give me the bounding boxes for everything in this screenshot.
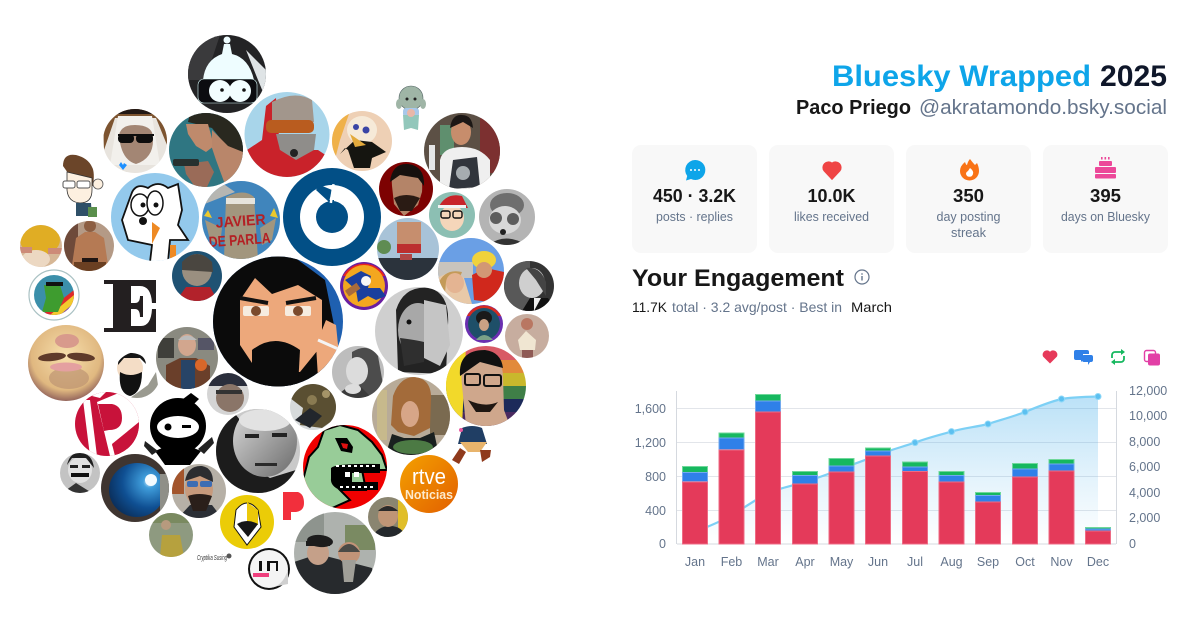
- avatar: Javier de Parla: DE PARLA: [208, 230, 271, 251]
- left axis labels: 1,200: [635, 436, 666, 450]
- engagement summary: March: [851, 299, 892, 315]
- avatar bubble cluster: [20, 35, 556, 594]
- month labels: Mar: [757, 555, 779, 569]
- avatar: nerd cartoon character: [63, 155, 103, 217]
- title: 2025: [1100, 60, 1167, 93]
- user name and handle: @akratamondo.bsky.social: [919, 97, 1167, 119]
- avatar: soldier in forest: [149, 513, 193, 557]
- avatar: small rainbow badge: [465, 305, 503, 343]
- avatar: Cthulhu baby: [396, 86, 426, 130]
- user name and handle: Paco Priego: [796, 97, 911, 119]
- avatar: man holding book: [424, 113, 500, 189]
- right axis labels: [1129, 384, 1167, 551]
- stat card: days on Bluesky: [1043, 145, 1168, 253]
- right axis labels: 6,000: [1129, 460, 1160, 474]
- avatar: bald man in suit: [504, 261, 556, 311]
- stat card: day posting streak: streak: [951, 226, 987, 240]
- user name and handle: [796, 97, 1167, 119]
- avatar: grey baby with goggles: [479, 189, 535, 245]
- month labels: Feb: [721, 555, 742, 569]
- month labels: Jan: [685, 555, 705, 569]
- avatar: Público red P: [75, 392, 139, 456]
- left axis labels: 400: [645, 504, 666, 518]
- stat card: day posting streak: 350: [953, 186, 984, 206]
- stat card: day posting streak: day posting: [936, 210, 1001, 224]
- avatar: main blue ring logo: [283, 168, 381, 266]
- icon: legend replies: [1074, 350, 1093, 365]
- month labels: Aug: [940, 555, 963, 569]
- avatar: man with sunglasses: [103, 109, 167, 173]
- stat card: likes received: [769, 145, 894, 253]
- avatar: big cartoon man with beard: [213, 254, 345, 387]
- month labels: May: [830, 555, 854, 569]
- stacked bars: [682, 394, 1110, 544]
- avatar: protest crowd: [377, 218, 439, 280]
- right axis labels: 4,000: [1129, 486, 1160, 500]
- right axis labels: 2,000: [1129, 511, 1160, 525]
- right axis labels: 8,000: [1129, 435, 1160, 449]
- avatar: Javier de Parla: [202, 181, 280, 259]
- left axis labels: 1,600: [635, 402, 666, 416]
- section heading: Your Engagement: [632, 265, 844, 292]
- avatar: signature scribble: Cryptika Susing: [197, 555, 227, 562]
- avatar: people with yellow hat: [438, 238, 504, 304]
- month labels: Dec: [1087, 555, 1109, 569]
- avatar: blue eye tunnel: [101, 454, 170, 522]
- icon: flame: [960, 159, 979, 180]
- right axis labels: 0: [1129, 537, 1136, 551]
- chart legend: [1043, 349, 1160, 366]
- stat card: days on Bluesky: days on Bluesky: [1061, 210, 1151, 224]
- avatar: man with cap: [207, 373, 249, 415]
- left axis labels: [635, 402, 666, 551]
- avatar: Bender robot: [188, 35, 268, 113]
- avatar: dog in red parka: [244, 92, 330, 178]
- cumulative area: [695, 396, 1098, 544]
- avatar: blue hat character: [452, 426, 491, 464]
- stat card: posts and replies: posts · replies: [656, 210, 733, 224]
- avatar: yellow sticker man: [220, 495, 274, 549]
- icon: legend repost: [1111, 349, 1125, 365]
- avatar: cartoon with santa hat: [429, 192, 475, 238]
- avatar: child in red: [172, 251, 222, 301]
- avatar: white cartoon cat: [111, 173, 199, 262]
- left axis labels: 800: [645, 470, 666, 484]
- avatar: man with glasses small: [368, 497, 408, 537]
- avatar: man with mustache close-up: [28, 325, 104, 401]
- avatar: Calimero chick: [332, 111, 392, 171]
- cumulative points: [802, 394, 1101, 485]
- avatar: blue cartoon with rainbow ring: [340, 262, 388, 310]
- avatar: green dinosaur badge: [29, 270, 79, 320]
- cumulative line: [695, 396, 1098, 532]
- icon: speech bubble: [685, 160, 705, 180]
- right axis labels: 10,000: [1129, 409, 1167, 423]
- avatar: rainbow flag man with glasses: [446, 346, 526, 426]
- month labels: Jun: [868, 555, 888, 569]
- icon: info: [855, 270, 869, 284]
- month labels: [685, 555, 1109, 569]
- engagement summary: [632, 299, 892, 315]
- month labels: Sep: [977, 555, 999, 569]
- avatar: El Espanol E logo: [85, 261, 175, 351]
- avatar: black ninja: [144, 393, 214, 465]
- stat card: likes received: 10.0K: [808, 186, 856, 206]
- avatar: signature scribble: [197, 554, 232, 562]
- month labels: Nov: [1050, 555, 1073, 569]
- stat card: posts and replies: [632, 145, 757, 253]
- avatar: Anthony Hopkins portrait: [216, 405, 300, 493]
- avatar: bw man covering eye: [375, 287, 463, 375]
- icon: legend heart: [1043, 350, 1057, 364]
- avatar: woman with gun painting: [169, 113, 243, 187]
- avatar: Javier de Parla: JAVIER: [215, 211, 266, 232]
- icon: birthday cake: [1095, 157, 1116, 178]
- avatar: Groucho Marx: [60, 453, 100, 493]
- right axis labels: 12,000: [1129, 384, 1167, 398]
- avatar: man holding film reel: [156, 327, 218, 389]
- engagement chart: [635, 384, 1167, 569]
- avatar: muscular man: [64, 220, 114, 271]
- month labels: Apr: [795, 555, 815, 569]
- avatar: two men selfie: [294, 512, 376, 594]
- avatar: bearded man red background: [379, 162, 433, 216]
- stat card: day posting streak: [906, 145, 1031, 253]
- avatar: woman bw: [332, 346, 384, 398]
- month labels: Oct: [1015, 555, 1035, 569]
- engagement summary: total · 3.2 avg/post · Best in: [672, 299, 842, 315]
- stat card: likes received: likes received: [794, 210, 869, 224]
- icon: heart: [822, 161, 842, 180]
- left axis labels: 0: [659, 537, 666, 551]
- stat card: days on Bluesky: 395: [1090, 186, 1121, 206]
- avatar: pixel ghost: [248, 548, 290, 590]
- avatar: rtve Noticias logo: [400, 455, 458, 513]
- avatar: man with blue sunglasses: [172, 464, 226, 518]
- icon: legend quotes: [1144, 350, 1160, 366]
- avatar: hedgehog: [290, 384, 336, 430]
- avatar: Tintin-style bearded man: [117, 352, 158, 398]
- avatar: rtve Noticias logo: Noticias: [405, 487, 453, 502]
- avatar: green pixel dinosaur: [303, 425, 387, 509]
- avatar: rtve Noticias logo: rtve: [412, 464, 446, 489]
- avatar: rocker with long hair: [372, 377, 450, 460]
- month labels: Jul: [907, 555, 923, 569]
- grid lines: [677, 408, 1116, 510]
- avatar: small red P logo: [283, 492, 304, 520]
- avatar: old photo of baby: [505, 314, 549, 359]
- avatar: hands with pastry: [20, 225, 62, 268]
- engagement summary: 11.7K: [632, 299, 668, 315]
- title: Bluesky Wrapped: [832, 60, 1091, 93]
- stat card: posts and replies: 450 · 3.2K: [653, 186, 736, 206]
